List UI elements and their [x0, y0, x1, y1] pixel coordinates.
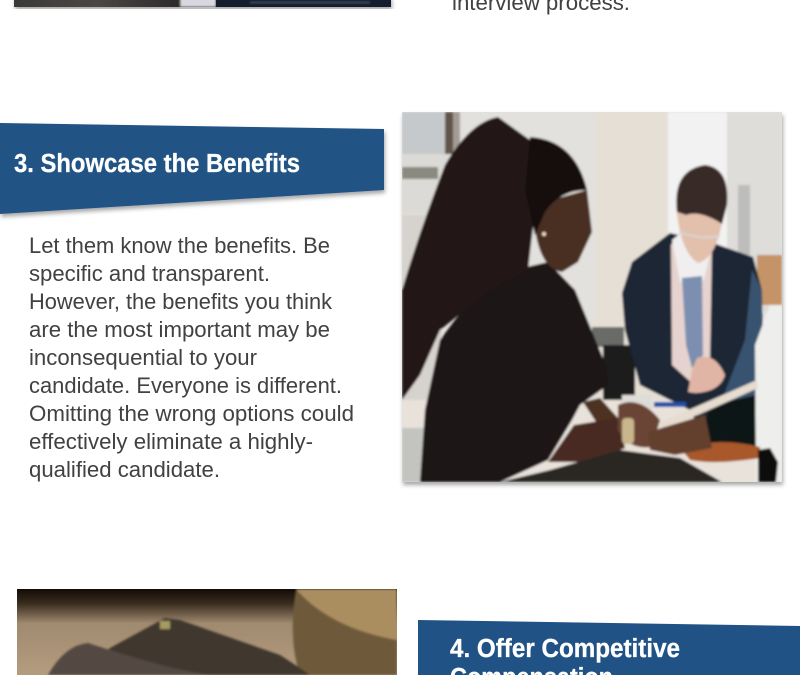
- text block: benefits paragraph: candidate. Everyone is different.: [29, 373, 342, 398]
- text block: benefits paragraph: Let them know the benefits. Be: [29, 233, 330, 258]
- woman: [402, 117, 722, 482]
- clipboard and pen: [654, 380, 758, 428]
- text block: benefits paragraph: inconsequential to your: [29, 345, 257, 370]
- heading banner: 4. Offer Competitive Compensation: [418, 620, 800, 675]
- text block: benefits paragraph: qualified candidate.: [29, 457, 220, 482]
- wallets: [108, 617, 310, 675]
- text block: benefits paragraph: specific and transparent.: [29, 261, 270, 286]
- photo: woman and man reviewing a clipboard: [402, 112, 782, 482]
- photo: previous section (cropped): [14, 0, 391, 7]
- man: [622, 165, 763, 450]
- heading banner: 4. Offer Competitive Compensation: 4. Offer Competitive: [450, 635, 680, 663]
- text block: benefits paragraph: Omitting the wrong options could: [29, 401, 354, 426]
- cylinder object: [293, 589, 397, 675]
- photo: leather wallets (cropped): [17, 589, 397, 675]
- text block: benefits paragraph: [29, 233, 354, 482]
- heading banner: 3. Showcase the Benefits: 3. Showcase the Benefits: [14, 150, 300, 178]
- text block: benefits paragraph: are the most important may be: [29, 317, 330, 342]
- text block: benefits paragraph: However, the benefits you think: [29, 289, 333, 314]
- text block: benefits paragraph: effectively eliminate a highly-: [29, 429, 313, 454]
- chair: [402, 305, 782, 482]
- wall panels: [402, 112, 782, 482]
- heading banner: 3. Showcase the Benefits: [0, 123, 384, 214]
